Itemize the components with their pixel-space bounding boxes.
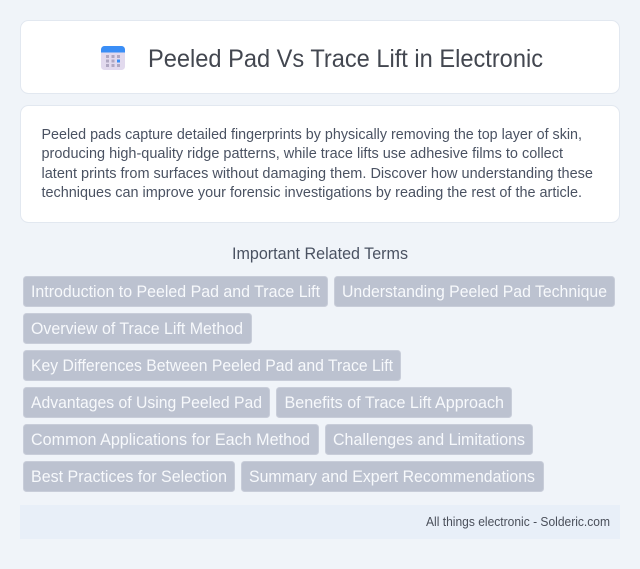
tag: best practices	[24, 462, 234, 492]
icon: calendar	[101, 46, 125, 70]
text block: description paragraph: producing high-quality ridge patterns, while trace lifts use adhesive films to collect	[42, 145, 564, 162]
tag: key differences: Key Differences Between Peeled Pad and Trace Lift	[31, 357, 393, 375]
tag: benefits	[276, 388, 512, 418]
text block: description paragraph: techniques can improve your forensic investigations by reading the rest of the article.	[42, 184, 582, 201]
tag: introduction: Introduction to Peeled Pad and Trace Lift	[31, 283, 320, 301]
title: Peeled Pad Vs Trace Lift in Electronic	[148, 45, 543, 73]
panel: header	[20, 20, 620, 94]
tag: trace lift overview	[24, 314, 252, 344]
tag: challenges	[326, 424, 532, 454]
tag: challenges: Challenges and Limitations	[333, 431, 525, 449]
tag: key differences	[24, 350, 400, 380]
text block: description paragraph	[42, 126, 593, 201]
tag: best practices: Best Practices for Selection	[31, 468, 227, 486]
panel: description	[20, 106, 620, 222]
tag: trace lift overview: Overview of Trace Lift Method	[31, 320, 243, 338]
tag: advantages	[24, 388, 270, 418]
tag: common applications	[24, 424, 318, 454]
heading: important related terms: Important Related Terms	[232, 245, 408, 263]
footer: All things electronic - Solderic.com	[426, 515, 610, 529]
tag: benefits: Benefits of Trace Lift Approach	[284, 394, 504, 412]
tag: peeled pad technique	[334, 276, 614, 306]
tag list: related terms	[24, 276, 614, 492]
text block: description paragraph: Peeled pads capture detailed fingerprints by physically removing the top layer of skin,	[42, 126, 582, 143]
text block: description paragraph: latent prints from surfaces without damaging them. Discover how understanding these	[42, 165, 593, 182]
tag: common applications: Common Applications for Each Method	[31, 431, 310, 449]
tag: advantages: Advantages of Using Peeled Pad	[31, 394, 262, 412]
tag: introduction	[24, 276, 328, 306]
tag: summary: Summary and Expert Recommendations	[249, 468, 535, 486]
tag: peeled pad technique: Understanding Peeled Pad Technique	[342, 283, 607, 301]
footer	[20, 505, 620, 539]
tag: summary	[242, 462, 544, 492]
